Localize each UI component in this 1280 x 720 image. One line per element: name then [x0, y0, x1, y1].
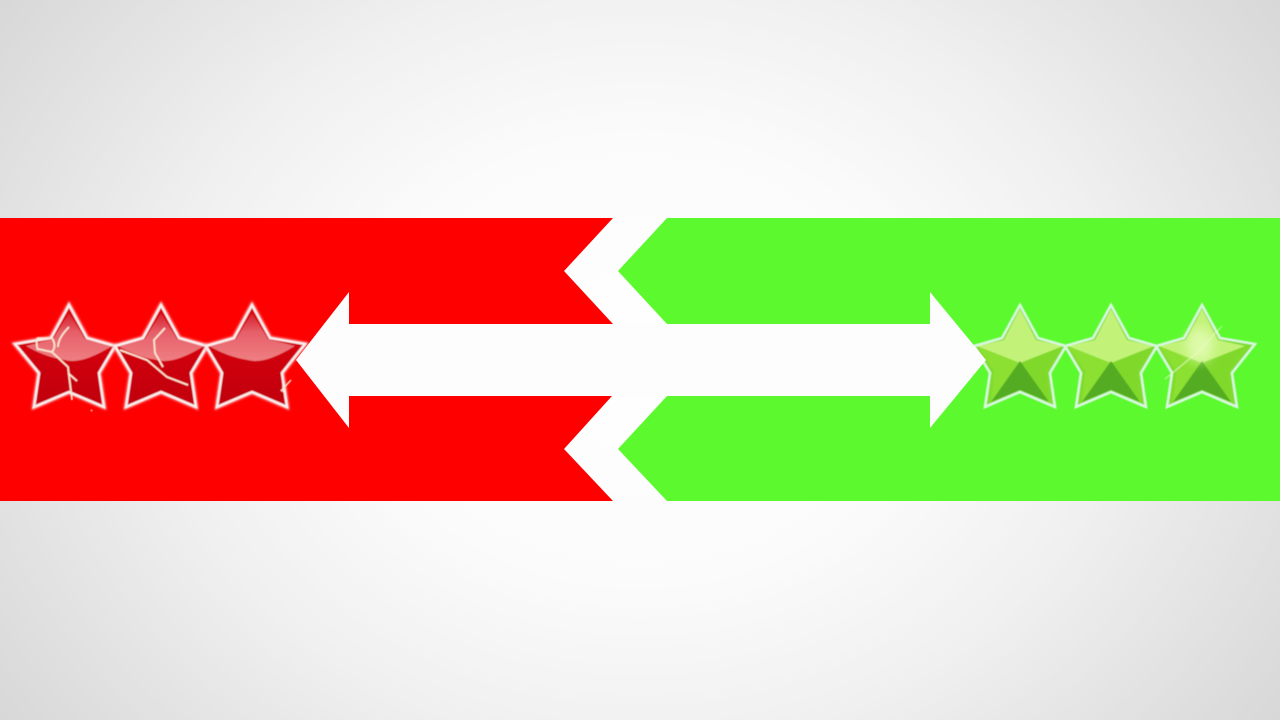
panel: green band: [618, 218, 1280, 501]
red band upper segment: [0, 218, 613, 324]
green band upper segment: [618, 218, 1280, 324]
rating: three shining green stars: [974, 305, 1255, 407]
icon: red star 3: [206, 305, 305, 407]
rating: three cracked red stars: [15, 305, 305, 411]
green band lower segment: [618, 396, 1280, 501]
icon: green star 2: [1065, 305, 1157, 407]
arrow: white double-headed arrow: [296, 292, 986, 428]
cracks on star 1: [37, 327, 92, 411]
green band middle segment: [930, 324, 1280, 396]
icon: cracked red star 1: [15, 305, 115, 411]
icon: green star 1: [974, 305, 1066, 407]
panel: red band: [0, 218, 613, 501]
cracks on star 2: [120, 328, 188, 385]
red band lower segment: [0, 396, 613, 501]
red band middle segment: [0, 324, 350, 396]
sparkle rays: [1165, 326, 1222, 379]
icon: green star 3 with sparkle: [1156, 305, 1255, 407]
sparkle highlight: [1186, 327, 1214, 363]
crack on star 3: [281, 380, 291, 392]
icon: cracked red star 2: [115, 305, 207, 407]
